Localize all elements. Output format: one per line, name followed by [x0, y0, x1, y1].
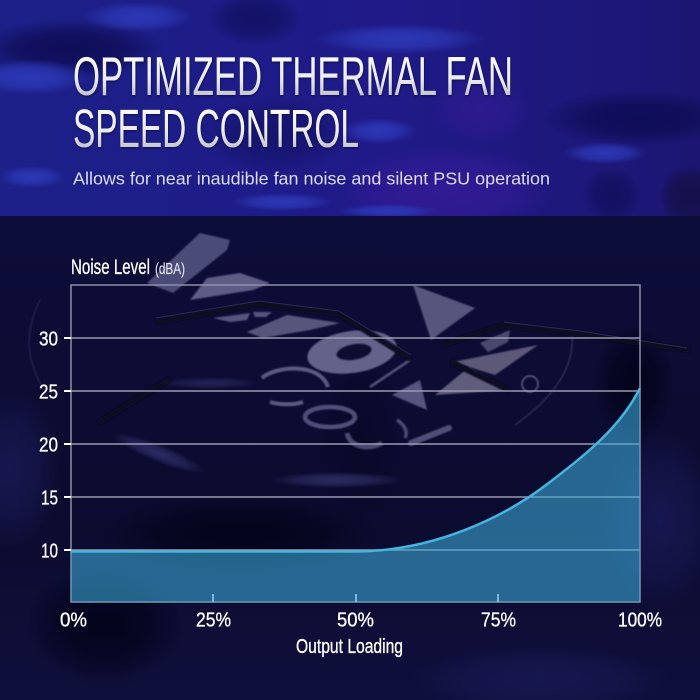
line chart: noise level vs output loading: [39, 256, 662, 658]
y axis labels: 10: [41, 540, 58, 562]
y axis labels: 20: [39, 434, 58, 456]
area under noise curve: [71, 388, 640, 602]
background: blurred blue header band: [0, 0, 700, 235]
x axis labels: 0%: [60, 608, 87, 632]
logo ring and thin script: [29, 300, 572, 447]
subtitle: Allows for near inaudible fan noise and silent PSU operation: [73, 168, 550, 188]
plot frame and grid lines: [64, 285, 640, 602]
x axis labels: 75%: [481, 608, 516, 632]
x axis labels: 100%: [618, 608, 662, 632]
y axis labels: [39, 328, 58, 562]
noise curve line: [71, 388, 640, 552]
y axis ticks: [64, 338, 71, 550]
background: darkened fan hub photo: [0, 216, 700, 700]
title: SPEED CONTROL: [73, 99, 359, 159]
y axis labels: 15: [41, 486, 58, 510]
y axis title: Noise Level: [71, 256, 150, 279]
x axis labels: [60, 608, 662, 632]
x axis ticks: [213, 594, 498, 602]
faint highlights: [116, 435, 200, 472]
x axis labels: 50%: [337, 608, 374, 632]
dark hexagon ribs: [98, 304, 690, 423]
y axis labels: 25: [39, 380, 58, 404]
y axis title: (dBA): [155, 261, 185, 278]
y axis labels: 30: [39, 328, 58, 350]
x axis labels: 25%: [196, 608, 231, 632]
x axis title: Output Loading: [296, 636, 403, 658]
logo fragments: [147, 233, 538, 410]
title: [73, 45, 513, 159]
